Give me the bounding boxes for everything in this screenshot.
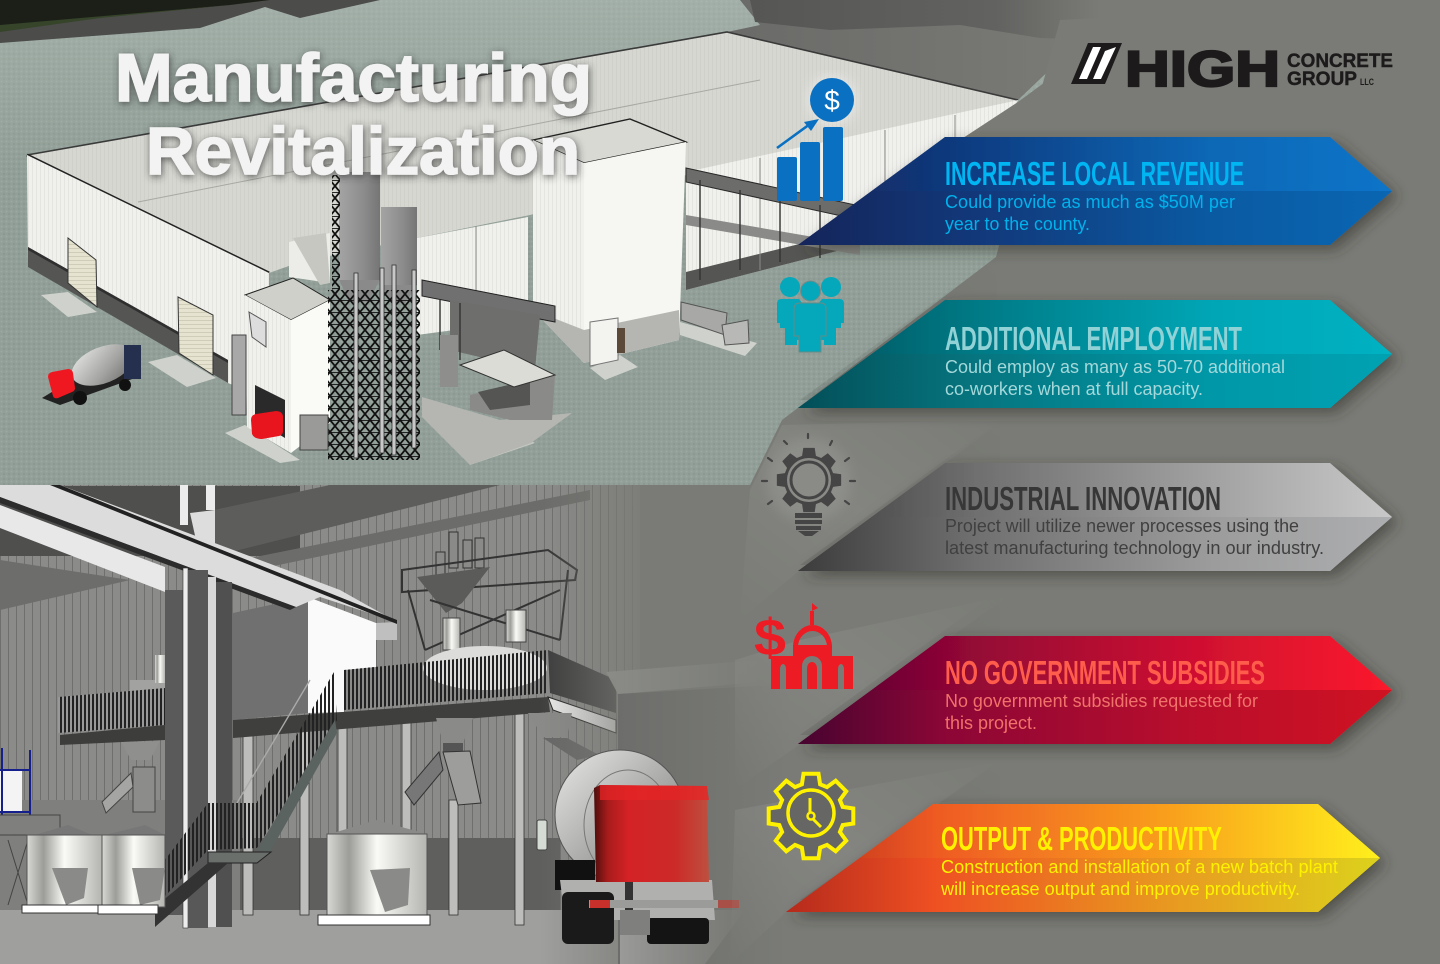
fade to grey	[540, 485, 660, 964]
tower	[533, 119, 686, 163]
icon: workforce group	[777, 277, 844, 352]
left wall	[27, 155, 269, 400]
icon: revenue growth chart	[777, 75, 857, 201]
title	[115, 40, 592, 189]
icon: government building and dollar	[754, 603, 853, 689]
canopy and ramps	[422, 397, 572, 465]
banner: output and productivity	[786, 804, 1380, 912]
panel: aerial view of plant	[0, 0, 1440, 485]
stairs	[155, 672, 337, 927]
left platform	[58, 655, 165, 813]
logo: High Concrete Group	[1071, 41, 1393, 97]
back right wall	[686, 100, 1018, 290]
conveyors	[686, 168, 860, 220]
room box	[233, 597, 397, 720]
pads	[41, 292, 97, 317]
banner: no government subsidies: this project.	[945, 713, 1037, 733]
banner: output and productivity: will increase output and improve productivity.	[940, 879, 1300, 899]
banner: output and productivity: Construction and installation of a new batch plant	[941, 857, 1338, 877]
main roof	[27, 32, 1018, 273]
banner: additional employment: ADDITIONAL EMPLOYMENT	[945, 320, 1242, 357]
banner: increase local revenue: year to the county.	[945, 214, 1090, 234]
equipment	[681, 302, 727, 335]
banner: industrial innovation: INDUSTRIAL INNOVATION	[945, 480, 1221, 517]
silos and lattice	[339, 172, 380, 280]
banner: no government subsidies: No government subsidies requested for	[945, 691, 1258, 711]
logo: High Concrete Group: LLC	[1360, 77, 1374, 87]
logo: High Concrete Group: CONCRETE	[1287, 51, 1393, 72]
right platform	[233, 646, 616, 805]
logo: High Concrete Group: GROUP	[1287, 69, 1357, 90]
annex	[289, 233, 330, 283]
hopper frame and pipes	[402, 532, 577, 650]
banner: output and productivity: OUTPUT & PRODUCTIVITY	[941, 820, 1222, 857]
mixer truck	[537, 750, 739, 944]
banner: industrial innovation: Project will utilize newer processes using the	[945, 516, 1299, 536]
posts	[243, 713, 524, 925]
logo: High Concrete Group: HIGH	[1125, 41, 1280, 97]
icon: red truck box at door	[251, 411, 283, 439]
icon: government building and dollar: $	[754, 609, 786, 667]
blue rack	[0, 748, 60, 905]
hoppers	[22, 820, 430, 925]
icon: clock gear	[769, 774, 853, 858]
banner: additional employment	[798, 300, 1392, 408]
icon: revenue growth chart: $	[824, 85, 840, 116]
banner: industrial innovation	[798, 463, 1392, 571]
banner: increase local revenue	[798, 137, 1392, 245]
banner: increase local revenue: Could provide as much as $50M per	[945, 192, 1235, 212]
icon: innovation light bulb gear	[762, 434, 855, 536]
white roof beam and columns	[0, 485, 397, 928]
banner: increase local revenue: INCREASE LOCAL REVENUE	[945, 155, 1244, 192]
banner: no government subsidies	[798, 636, 1392, 744]
banner: no government subsidies: NO GOVERNMENT SUBSIDIES	[945, 654, 1265, 691]
title: Revitalization	[146, 114, 580, 189]
banner: additional employment: Could employ as many as 50-70 additional	[945, 357, 1285, 377]
banner: industrial innovation: latest manufacturing technology in our industry.	[945, 538, 1324, 558]
title: Manufacturing	[115, 40, 592, 116]
banner: additional employment: co-workers when at full capacity.	[945, 379, 1203, 399]
icon: small mixer truck	[42, 336, 141, 405]
diagonal background facets	[730, 0, 1440, 964]
panel: interior plant view	[0, 485, 800, 964]
